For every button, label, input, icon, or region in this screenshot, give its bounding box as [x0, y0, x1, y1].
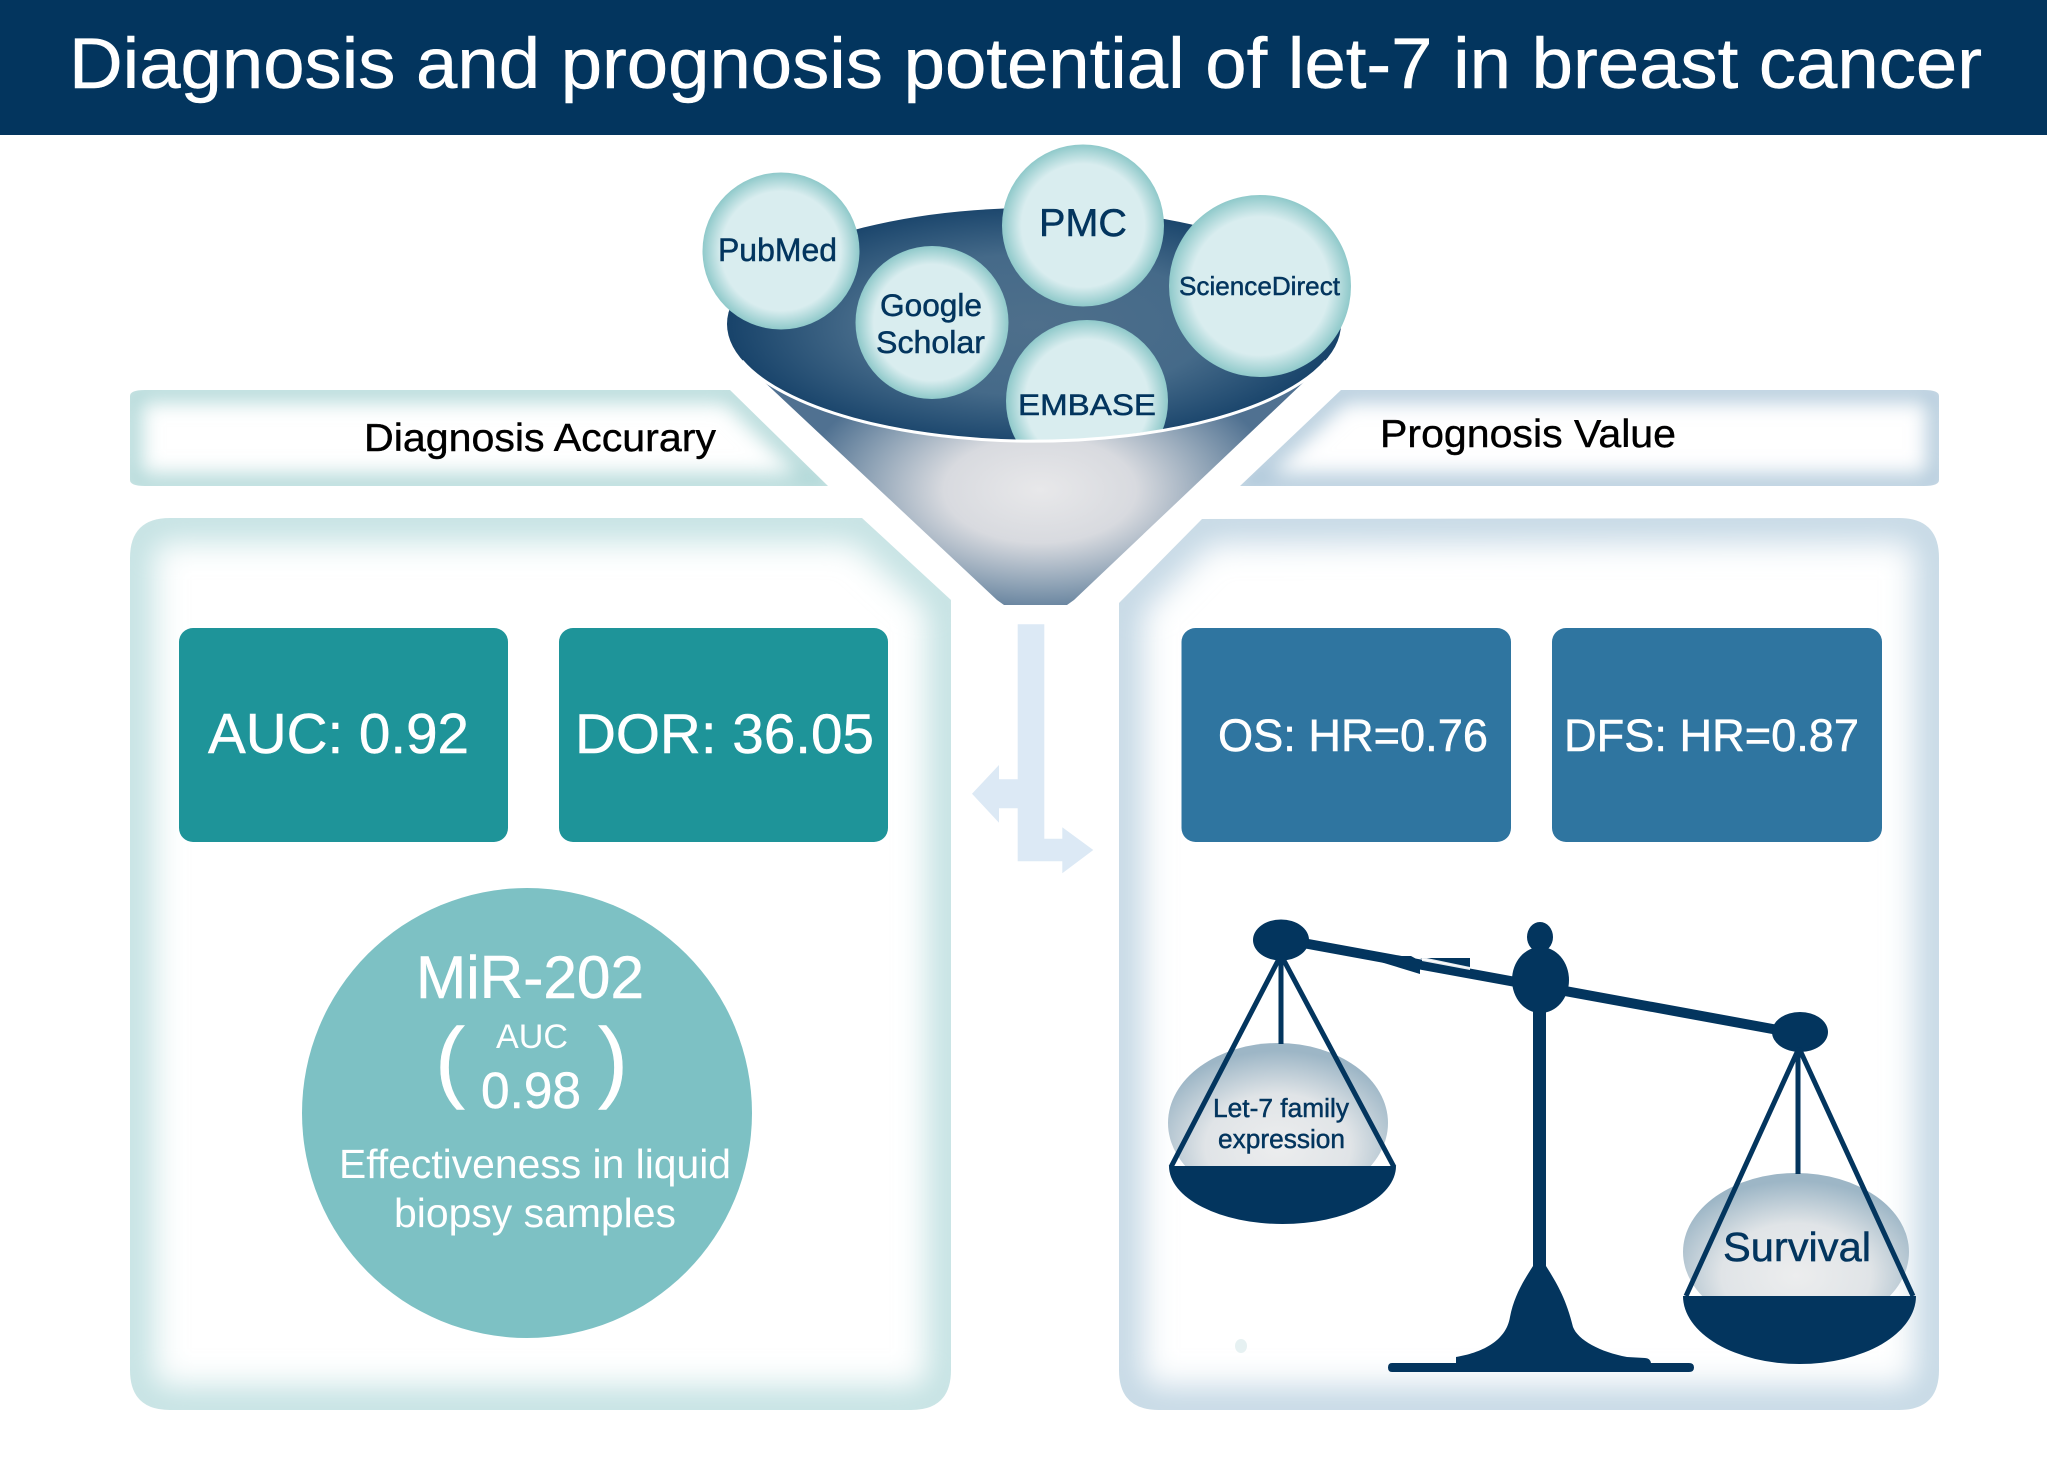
bubble: PubMed: [702, 172, 860, 330]
bubble: Google Scholar: Google: [880, 287, 982, 323]
circle callout: MiR-202: [302, 888, 752, 1338]
left ball: Let-7 family expression: expression: [1218, 1124, 1345, 1154]
funnel of literature databases: [702, 144, 1351, 605]
scale base: [1388, 1266, 1694, 1372]
metric box: DFS: DFS: HR=0.87: [1564, 710, 1859, 761]
bubble: EMBASE: EMBASE: [1018, 389, 1156, 422]
center pivot: [1512, 947, 1569, 1013]
left pan: [1169, 955, 1396, 1224]
bubble: Google Scholar: [856, 246, 1008, 399]
metric box: OS: [1182, 628, 1511, 842]
small decorative speck: [1235, 1339, 1247, 1353]
metric box: DOR: DOR: 36.05: [575, 702, 874, 765]
title banner: Diagnosis and prognosis potential of let-7 in breast cancer: [69, 25, 1982, 104]
metric box: DFS: [1552, 628, 1882, 842]
metric box: AUC: [179, 628, 508, 842]
title banner: [0, 0, 2047, 135]
funnel cone: [742, 361, 1326, 605]
left ball: Let-7 family expression: Let-7 family: [1213, 1093, 1350, 1123]
circle callout: MiR-202: biopsy samples: [394, 1190, 676, 1236]
panel: prognosis value: [1119, 518, 1939, 1410]
circle callout: MiR-202: ): [598, 1011, 628, 1111]
balance scale: [1168, 920, 1916, 1372]
circle callout: MiR-202: MiR-202: [416, 944, 644, 1011]
bubble: PMC: [1002, 144, 1164, 306]
arrow: splitting down to both panels: [972, 624, 1093, 873]
bubble: ScienceDirect: ScienceDirect: [1179, 271, 1341, 301]
right ball: survival: Survival: [1723, 1224, 1871, 1270]
bubble: PMC: PMC: [1039, 202, 1127, 245]
right pan: [1683, 1048, 1916, 1364]
heading banner: diagnosis accuracy: [130, 390, 828, 486]
circle callout: MiR-202: Effectiveness in liquid: [339, 1141, 731, 1187]
left ball: Let-7 family expression: [1168, 1043, 1388, 1203]
right beam end: [1772, 1012, 1828, 1052]
left beam end: [1253, 920, 1309, 960]
panel: diagnosis accuracy: [130, 518, 951, 1410]
funnel rim highlight: [742, 361, 1326, 441]
heading banner: prognosis value: [1240, 390, 1939, 486]
right ball: survival: [1683, 1173, 1909, 1331]
funnel mouth: [727, 208, 1341, 440]
circle callout: MiR-202: AUC: [496, 1018, 568, 1056]
heading banner: prognosis value: Prognosis Value: [1380, 413, 1676, 456]
bubble: ScienceDirect: [1169, 195, 1351, 377]
bubble: PubMed: PubMed: [718, 232, 837, 268]
circle callout: MiR-202: 0.98: [481, 1062, 581, 1119]
metric box: AUC: AUC: 0.92: [208, 702, 469, 765]
beam pointer: [1358, 956, 1470, 974]
scale beam: [1281, 939, 1800, 1034]
circle callout: MiR-202: (: [435, 1011, 465, 1111]
bubble: Google Scholar: Scholar: [876, 324, 985, 360]
metric box: DOR: [559, 628, 888, 842]
center knob top: [1527, 922, 1553, 952]
bubble: EMBASE: [1006, 320, 1168, 440]
center pole: [1533, 1005, 1546, 1270]
metric box: OS: OS: HR=0.76: [1218, 710, 1488, 761]
heading banner: diagnosis accuracy: Diagnosis Accurary: [364, 417, 717, 460]
